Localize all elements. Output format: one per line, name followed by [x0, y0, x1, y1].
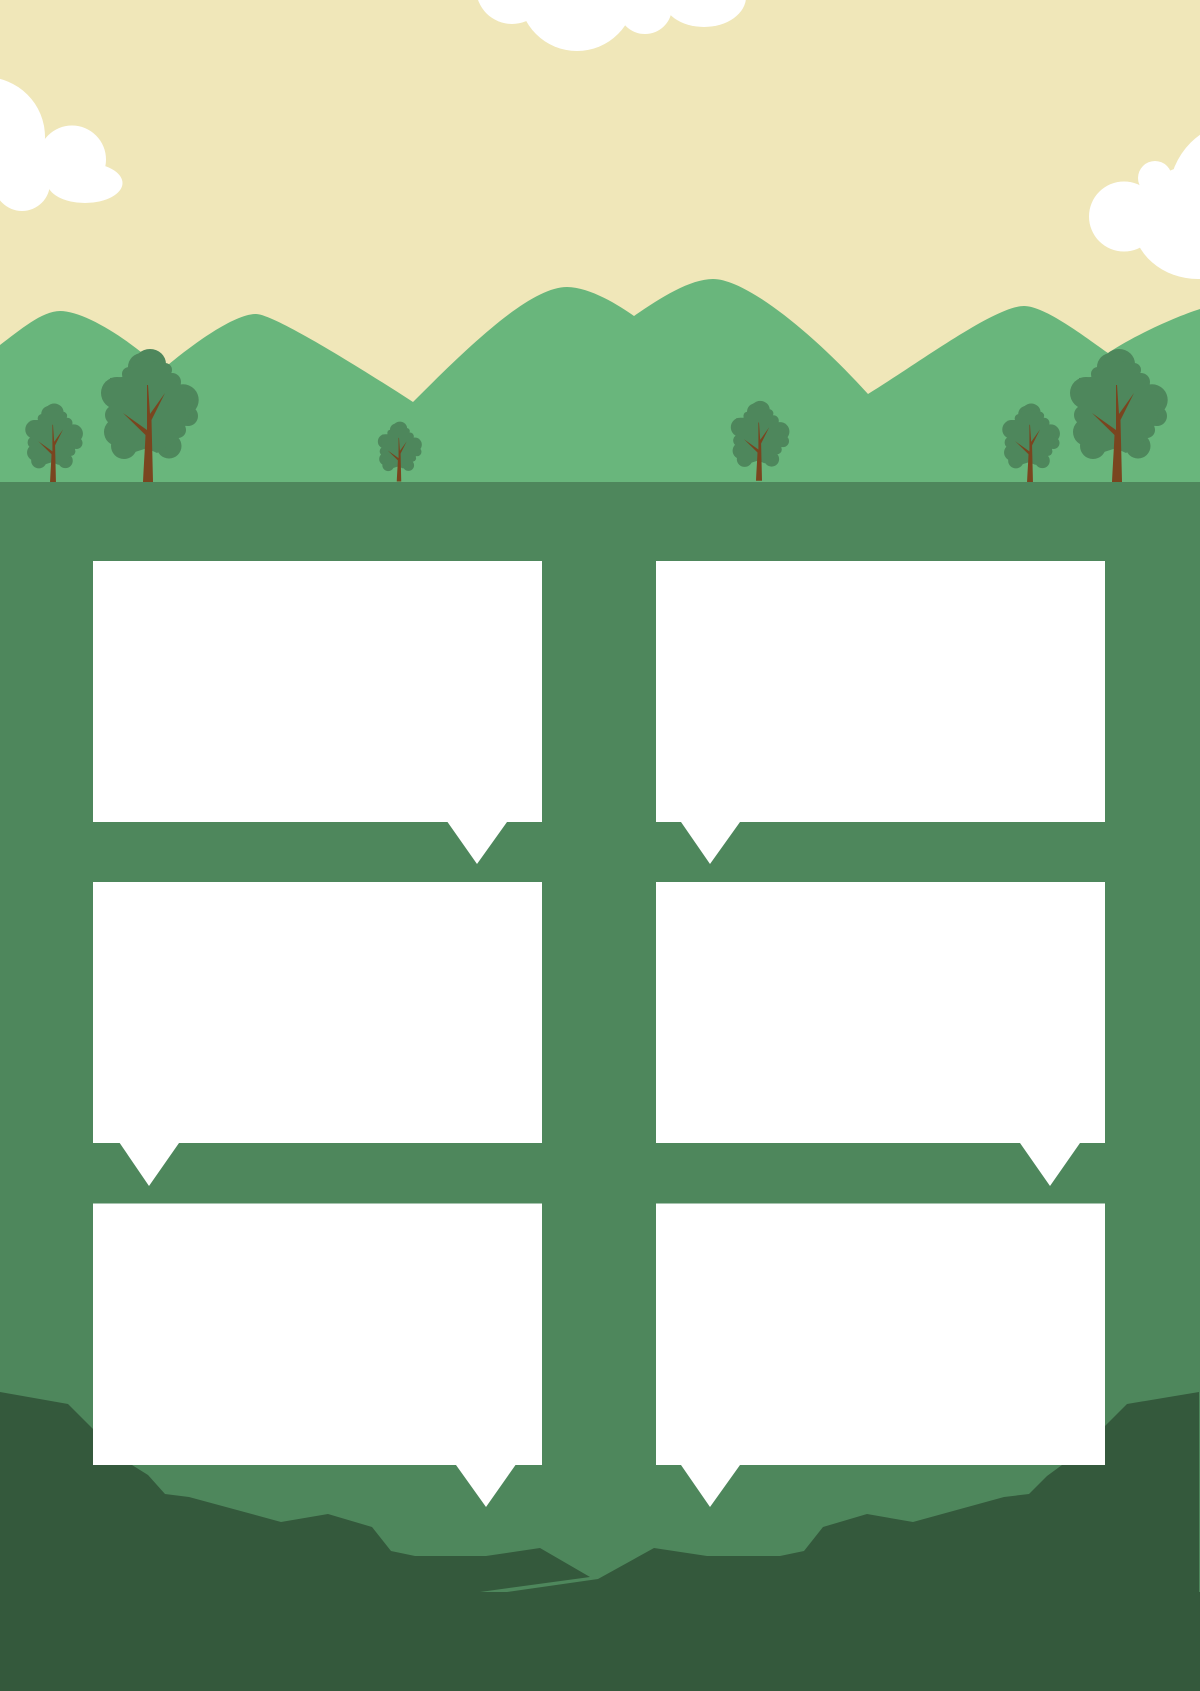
panel: row 2 right speech bubble: [656, 882, 1105, 1186]
tree: smallest centre left: [378, 422, 422, 482]
panel: row 1 left speech bubble: [93, 561, 542, 864]
tree: small far left: [25, 404, 83, 482]
panel: row 3 left speech bubble: [93, 1204, 542, 1507]
cloud: left: [0, 77, 122, 211]
mountains: [0, 279, 1200, 490]
tree: small right: [1002, 404, 1060, 482]
tree: large right: [1070, 349, 1168, 482]
panel: row 1 right speech bubble: [656, 561, 1105, 864]
tree: large left: [101, 349, 199, 482]
panel: row 3 right speech bubble: [656, 1204, 1105, 1507]
foreground dark hills: [0, 1392, 1200, 1691]
tree: small centre right: [731, 401, 789, 481]
ground: [0, 482, 1200, 1691]
cloud: right: [1089, 121, 1200, 279]
sky background: [0, 0, 1200, 482]
panel: row 2 left speech bubble: [93, 882, 542, 1186]
cloud: top centre: [476, 0, 746, 51]
